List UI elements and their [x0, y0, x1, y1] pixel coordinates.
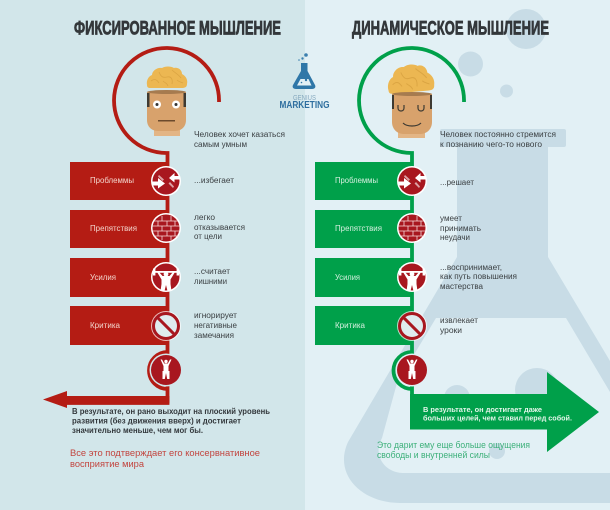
- left row: criticism: [70, 306, 238, 345]
- left row: criticism: игнорирует: [194, 311, 237, 320]
- left: intro text: [194, 130, 285, 149]
- right: conclusion text: Это дарит ему еще больше ощущения: [377, 440, 530, 450]
- right row: obstacles: [315, 210, 481, 248]
- right row: criticism: Критика: [335, 321, 366, 330]
- left row: problems: Проблеммы: [90, 176, 134, 185]
- left row: obstacles: от цели: [194, 232, 222, 241]
- left row: obstacles: [70, 210, 245, 248]
- icon: brain: [147, 66, 187, 88]
- left row: criticism: замечания: [194, 331, 234, 340]
- right row: effort: [315, 258, 517, 297]
- right: head with brain: [386, 63, 435, 138]
- left: result text: развития (без движения вверх) и достигает: [72, 416, 241, 426]
- left: conclusion text: восприятие мира: [70, 459, 144, 469]
- left: intro text: самым умным: [194, 140, 247, 149]
- right: intro text: [440, 130, 556, 149]
- left row: problems: ...избегает: [194, 176, 234, 185]
- left: head with brain: [147, 66, 187, 136]
- accent arc around final icon: [394, 352, 412, 389]
- right row: obstacles: неудачи: [440, 233, 470, 242]
- left row: obstacles: отказывается: [194, 223, 245, 232]
- left: result text: В результате, он рано выходит на плоский уровень: [72, 407, 270, 416]
- left: result text: [72, 407, 270, 435]
- logo: Genius Marketing: MARKETING: [280, 100, 330, 111]
- left: conclusion text: Все это подтверждает его консервнативное: [70, 448, 260, 458]
- icon: brain: [386, 63, 435, 94]
- right row: obstacles: принимать: [440, 224, 481, 233]
- right row: obstacles: умеет: [440, 214, 462, 223]
- left: result text: значительно меньше, чем мог бы.: [72, 426, 203, 435]
- right: icon person: [396, 354, 428, 386]
- left row: effort: лишними: [194, 277, 227, 286]
- left row: effort: [70, 258, 230, 297]
- right: conclusion text: свободы и внутренней силы: [377, 450, 490, 460]
- right: big arrow with result text: [410, 372, 599, 452]
- accent arc around final icon: [149, 352, 168, 389]
- right: big arrow with result text: больших целей, чем ставил перед собой.: [423, 414, 572, 422]
- right: intro text: Человек постоянно стремится: [440, 130, 556, 139]
- right row: effort: как путь повышения: [440, 272, 517, 281]
- right: big arrow with result text: В результате, он достигает даже: [423, 405, 542, 414]
- right row: effort: мастерства: [440, 282, 484, 291]
- left row: effort: Усилия: [90, 273, 116, 282]
- left row: criticism: негативные: [194, 321, 238, 330]
- left row: criticism: Критика: [90, 321, 121, 330]
- right row: criticism: [315, 306, 478, 345]
- right row: effort: ...воспринимает,: [440, 263, 502, 272]
- background: left panel: [0, 0, 305, 510]
- left row: problems: [70, 162, 234, 200]
- left flow: connector line and arrow: [43, 48, 219, 408]
- right row: criticism: извлекает: [440, 316, 478, 325]
- left: icon person: [150, 354, 182, 386]
- right row: problems: ...решает: [440, 178, 474, 187]
- right row: problems: Проблеммы: [335, 176, 378, 185]
- right row: problems: [315, 162, 474, 200]
- right: intro text: к познанию чего-то нового: [440, 140, 543, 149]
- arrow pointing left: [43, 391, 170, 408]
- left row: obstacles: Препятствия: [90, 224, 137, 233]
- background: right panel: [305, 0, 610, 510]
- logo: Genius Marketing: [280, 53, 330, 111]
- left: conclusion text: [70, 448, 260, 469]
- right: conclusion text: [377, 440, 530, 460]
- right row: obstacles: Препятствия: [335, 224, 382, 233]
- logo: Genius Marketing: GENIUS: [293, 93, 316, 102]
- left row: effort: ...считает: [194, 267, 230, 276]
- title: fixed mindset: ФИКСИРОВАННОЕ МЫШЛЕНИЕ: [74, 18, 281, 40]
- background flask illustration: [344, 9, 610, 503]
- right row: effort: Усилия: [335, 273, 360, 282]
- right flow: connector line: [359, 48, 464, 396]
- left row: obstacles: легко: [194, 213, 216, 222]
- left: intro text: Человек хочет казаться: [194, 130, 285, 139]
- right row: criticism: уроки: [440, 326, 462, 335]
